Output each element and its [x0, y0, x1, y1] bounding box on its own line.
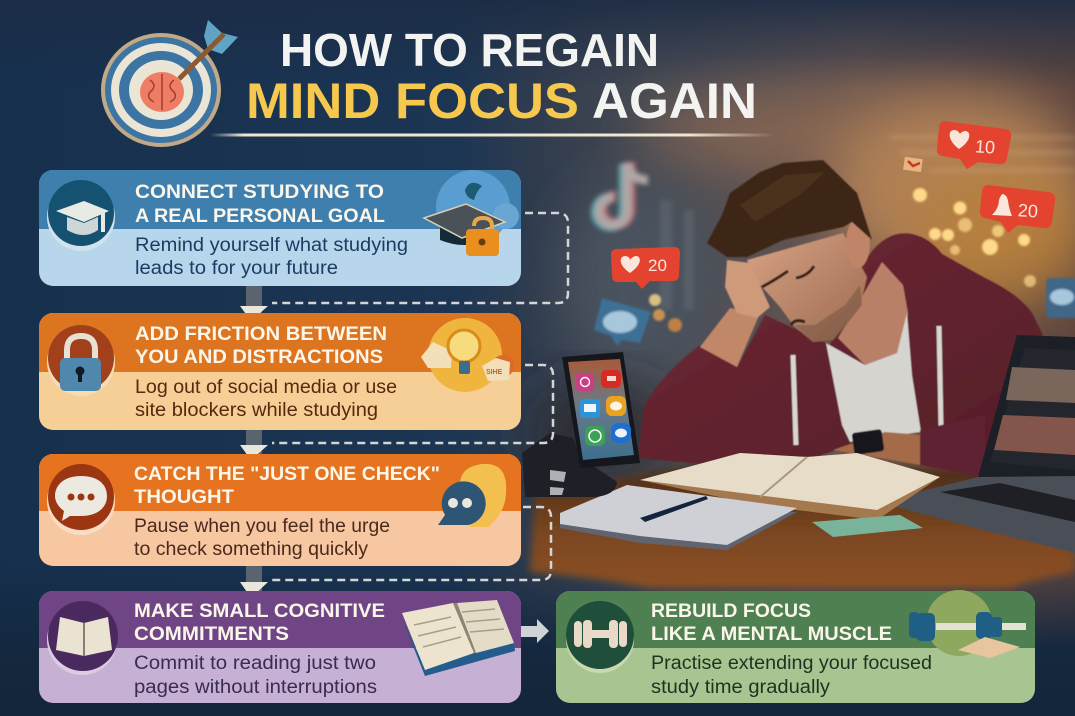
connector: dashed line from card 1	[272, 213, 568, 303]
heading	[135, 324, 387, 368]
heading: MAKE SMALL COGNITIVE	[134, 601, 385, 622]
stubble	[795, 285, 862, 342]
text block: pages without interruptions	[134, 677, 377, 698]
text block: to check something quickly	[134, 539, 369, 560]
heading: YOU AND DISTRACTIONS	[135, 347, 383, 368]
icon: graduation cap	[47, 180, 115, 251]
scene: table	[530, 465, 1075, 588]
face	[747, 233, 867, 342]
text block: Remind yourself what studying	[135, 235, 408, 256]
sticky notes	[812, 515, 923, 537]
heading: CATCH THE "JUST ONE CHECK"	[134, 464, 440, 485]
forearm	[700, 308, 760, 367]
heading	[134, 464, 440, 508]
icon: blurred chat at right edge	[1046, 278, 1075, 318]
app icons	[576, 370, 631, 446]
notification: bell 20	[980, 185, 1055, 233]
arrow	[179, 20, 238, 79]
arrow: card 2 to card 3	[240, 430, 268, 460]
heading: COMMITMENTS	[134, 624, 289, 645]
text block: leads to for your future	[135, 258, 338, 279]
bokeh lights	[649, 188, 1036, 332]
hoodie	[638, 233, 1043, 478]
icon: blurred chat bubble	[594, 298, 651, 346]
title	[246, 24, 757, 129]
eyes and mouth	[762, 266, 814, 325]
neck	[838, 262, 908, 365]
text block	[651, 653, 932, 698]
panel: catch the thought	[39, 454, 521, 566]
title: HOW TO REGAIN	[280, 24, 659, 76]
panel: rebuild focus	[556, 590, 1035, 703]
icon: cap and padlock	[424, 170, 519, 256]
heading: THOUGHT	[134, 487, 234, 508]
heading	[135, 182, 385, 227]
text block: site blockers while studying	[135, 400, 378, 421]
open book	[640, 453, 940, 520]
notification: bell 20: 20	[1017, 200, 1039, 222]
heading: REBUILD FOCUS	[651, 601, 811, 622]
title icon: target with brain and arrow	[101, 20, 238, 147]
notification: heart 10	[937, 121, 1011, 169]
notification: heart 10: 10	[974, 136, 996, 158]
icon: speech bubble	[47, 464, 115, 535]
connector: dashed line from card 2	[272, 365, 553, 443]
heading: LIKE A MENTAL MUSCLE	[651, 624, 892, 645]
icon: padlock	[47, 325, 115, 396]
arrow: card 4 to card 5	[521, 619, 549, 643]
notebook and pen	[560, 485, 797, 550]
text block: study time gradually	[651, 677, 831, 698]
text block	[134, 653, 377, 698]
heading: A REAL PERSONAL GOAL	[135, 206, 385, 227]
text block	[134, 516, 390, 560]
icon: open book in circle	[47, 601, 118, 675]
icon: dumbbell in circle	[566, 601, 634, 673]
person: student	[638, 160, 1043, 478]
icon: open book	[401, 600, 515, 676]
title: AGAIN	[592, 73, 757, 129]
hair	[707, 160, 872, 257]
ear	[846, 218, 870, 268]
heading: CONNECT STUDYING TO	[135, 182, 384, 203]
notification: heart 20: 20	[648, 256, 667, 275]
t-shirt	[826, 313, 921, 442]
icon: barbell and book	[909, 590, 1026, 658]
connector: dashed line from card 3	[272, 507, 551, 580]
text block	[135, 377, 397, 421]
arrow: card 1 to card 2	[240, 286, 268, 321]
text block: Practise extending your focused	[651, 653, 932, 674]
notification: heart 20	[611, 247, 680, 289]
heading: ADD FRICTION BETWEEN	[135, 324, 387, 345]
hand	[725, 260, 770, 318]
brain	[140, 72, 184, 112]
text block	[135, 235, 408, 279]
heading	[651, 601, 892, 645]
icon: chat and bulb	[438, 464, 506, 527]
text block: Pause when you feel the urge	[134, 516, 390, 537]
phone with apps	[562, 352, 640, 468]
notification: envelope	[903, 157, 923, 172]
dark object on desk	[522, 433, 617, 497]
hoodie strings	[793, 326, 941, 445]
text block: Commit to reading just two	[134, 653, 376, 674]
icon: lightbulb and bubbles: SIHE	[486, 369, 503, 376]
heading	[134, 601, 385, 645]
text block: Log out of social media or use	[135, 377, 397, 398]
icon: lightbulb and bubbles	[421, 318, 514, 392]
title: MIND FOCUS	[246, 73, 579, 129]
right arm and watch	[833, 432, 922, 465]
panel: add friction	[39, 313, 521, 430]
arrow: card 3 to card 4	[240, 566, 268, 598]
laptop	[878, 335, 1075, 553]
panel: small commitments	[39, 591, 521, 703]
icon: blurred tiktok logo	[596, 162, 648, 226]
panel: connect studying	[39, 170, 521, 286]
